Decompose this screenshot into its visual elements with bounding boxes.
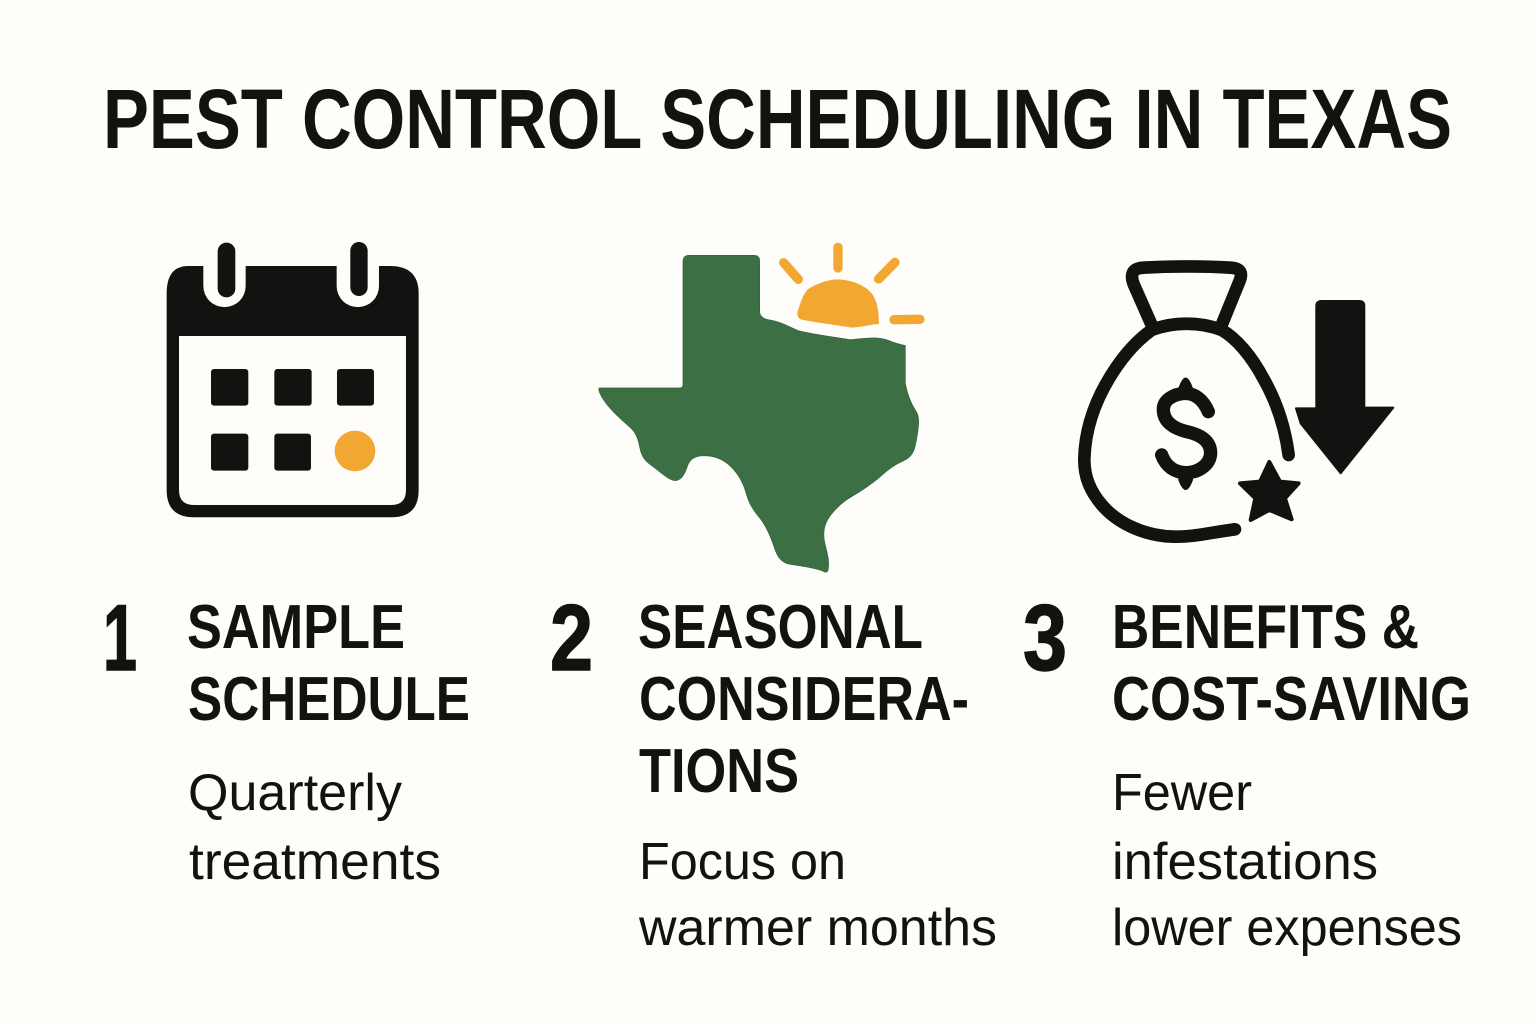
Texas state shape xyxy=(599,255,919,572)
heading: sample schedule xyxy=(187,593,470,734)
heading: seasonal considerations: SEASONAL xyxy=(638,593,923,662)
heading: seasonal considerations: TIONS xyxy=(639,737,799,806)
heading: benefits and cost-saving xyxy=(1112,593,1471,734)
text: fewer infestations lower expenses: lower expenses xyxy=(1112,899,1462,957)
heading: benefits and cost-saving: BENEFITS & xyxy=(1112,593,1419,662)
icon: money bag with down arrow xyxy=(1084,266,1393,537)
heading: seasonal considerations xyxy=(638,593,969,806)
text: quarterly treatments: treatments xyxy=(189,833,441,891)
text: focus on warmer months: Focus on xyxy=(639,833,846,891)
text: fewer infestations lower expenses: infestations xyxy=(1112,833,1378,891)
number 1: 1 xyxy=(103,585,137,690)
text: fewer infestations lower expenses: Fewer xyxy=(1112,764,1252,822)
number 3: 3 xyxy=(1023,585,1067,690)
text: quarterly treatments xyxy=(188,764,441,891)
money bag xyxy=(1084,266,1289,537)
heading: sample schedule: SAMPLE xyxy=(187,593,405,662)
heading: benefits and cost-saving: COST-SAVING xyxy=(1112,665,1471,734)
icon: calendar xyxy=(167,242,419,517)
heading: sample schedule: SCHEDULE xyxy=(188,665,470,734)
sun xyxy=(797,279,879,328)
number 2: 2 xyxy=(550,585,593,690)
star xyxy=(1240,462,1299,520)
down arrow xyxy=(1296,301,1393,473)
text: quarterly treatments: Quarterly xyxy=(188,764,402,822)
dollar sign xyxy=(1162,393,1211,473)
text: focus on warmer months: warmer months xyxy=(638,899,997,957)
icon: Texas map with sun xyxy=(599,247,920,572)
text: focus on warmer months xyxy=(638,833,997,957)
text: fewer infestations lower expenses xyxy=(1112,764,1462,957)
heading: seasonal considerations: CONSIDERA- xyxy=(639,665,969,734)
